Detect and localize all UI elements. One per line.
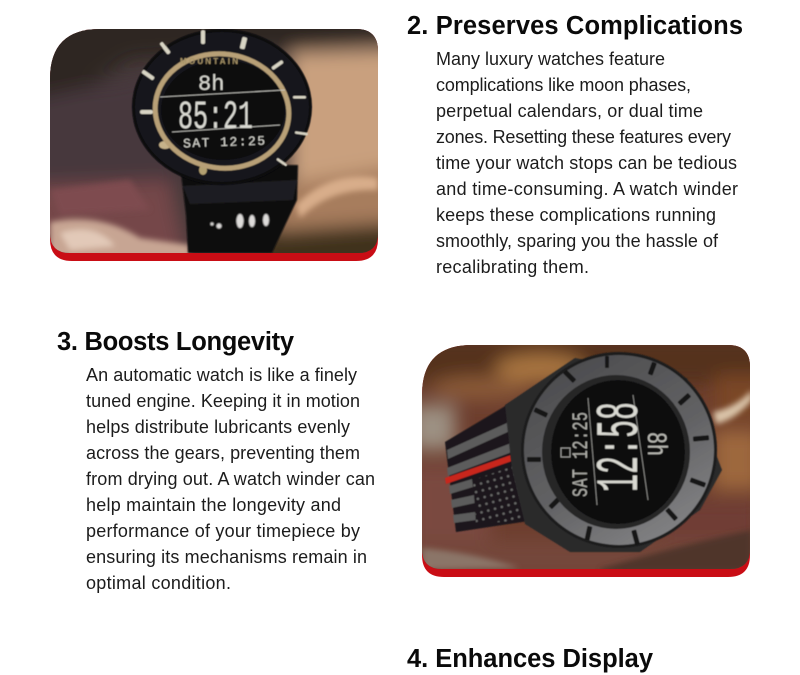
red card base — [50, 29, 378, 261]
text block: complications: smoothly, sparing you the hassle of — [436, 231, 719, 251]
screen — [161, 60, 285, 160]
text block: longevity: optimal condition. — [86, 573, 231, 593]
text block: longevity: help maintain the longevity and — [86, 495, 341, 515]
strap — [180, 165, 298, 253]
brand: MOUNTAIN — [180, 57, 238, 66]
text block: complications: recalibrating them. — [436, 257, 589, 277]
text block: longevity: ensuring its mechanisms remain in — [86, 547, 367, 567]
text block: complications: time your watch stops can be tedious — [436, 153, 737, 173]
text block: longevity: performance of your timepiece by — [86, 521, 360, 541]
text block: complications: keeps these complications running — [436, 205, 716, 225]
text block: longevity: An automatic watch is like a finely — [86, 365, 357, 385]
image card: grey watch with flag strap — [422, 345, 750, 577]
heading: 3. Boosts Longevity: 3. Boosts Longevity — [57, 328, 295, 356]
lcd text: 12:58 — [589, 402, 656, 492]
watch head: SAT 12:25 — [183, 134, 265, 151]
watch head: 85:21 — [178, 96, 253, 141]
photo: watch on wrist — [50, 29, 378, 253]
text block: longevity: across the gears, preventing them — [86, 443, 360, 463]
dial — [542, 375, 690, 529]
heading: 2. Preserves Complications: 2. Preserves Complications — [407, 12, 743, 40]
text block: longevity: from drying out. A watch winder can — [86, 469, 375, 489]
text block: complications — [436, 49, 738, 277]
text block: complications: complications like moon phases, — [436, 75, 691, 95]
watch head: 8h — [639, 432, 670, 456]
watch head — [132, 29, 312, 185]
text block: longevity: tuned engine. Keeping it in motion — [86, 391, 360, 411]
text block: longevity — [86, 365, 375, 593]
gold ring — [152, 50, 292, 172]
watch head — [505, 352, 722, 552]
text block: complications: and time-consuming. A watch winder — [436, 179, 738, 199]
text block: complications: Many luxury watches feature — [436, 49, 665, 69]
watch head: SAT 12:25 — [568, 412, 594, 497]
text block: longevity: helps distribute lubricants evenly — [86, 417, 350, 437]
bezel notches — [527, 356, 709, 545]
text block: complications: zones. Resetting these features every — [436, 127, 731, 147]
lcd text: 8h — [198, 72, 224, 97]
red card base — [422, 345, 750, 577]
star field — [473, 466, 525, 524]
photo: grey watch — [422, 345, 750, 569]
text block: complications: perpetual calendars, or dual time — [436, 101, 703, 121]
heading: 4. Enhances Display: 4. Enhances Display — [407, 645, 654, 673]
strap — [444, 406, 525, 532]
bezel markers — [140, 30, 308, 175]
image card: wrist watch with gold ring — [50, 29, 378, 261]
